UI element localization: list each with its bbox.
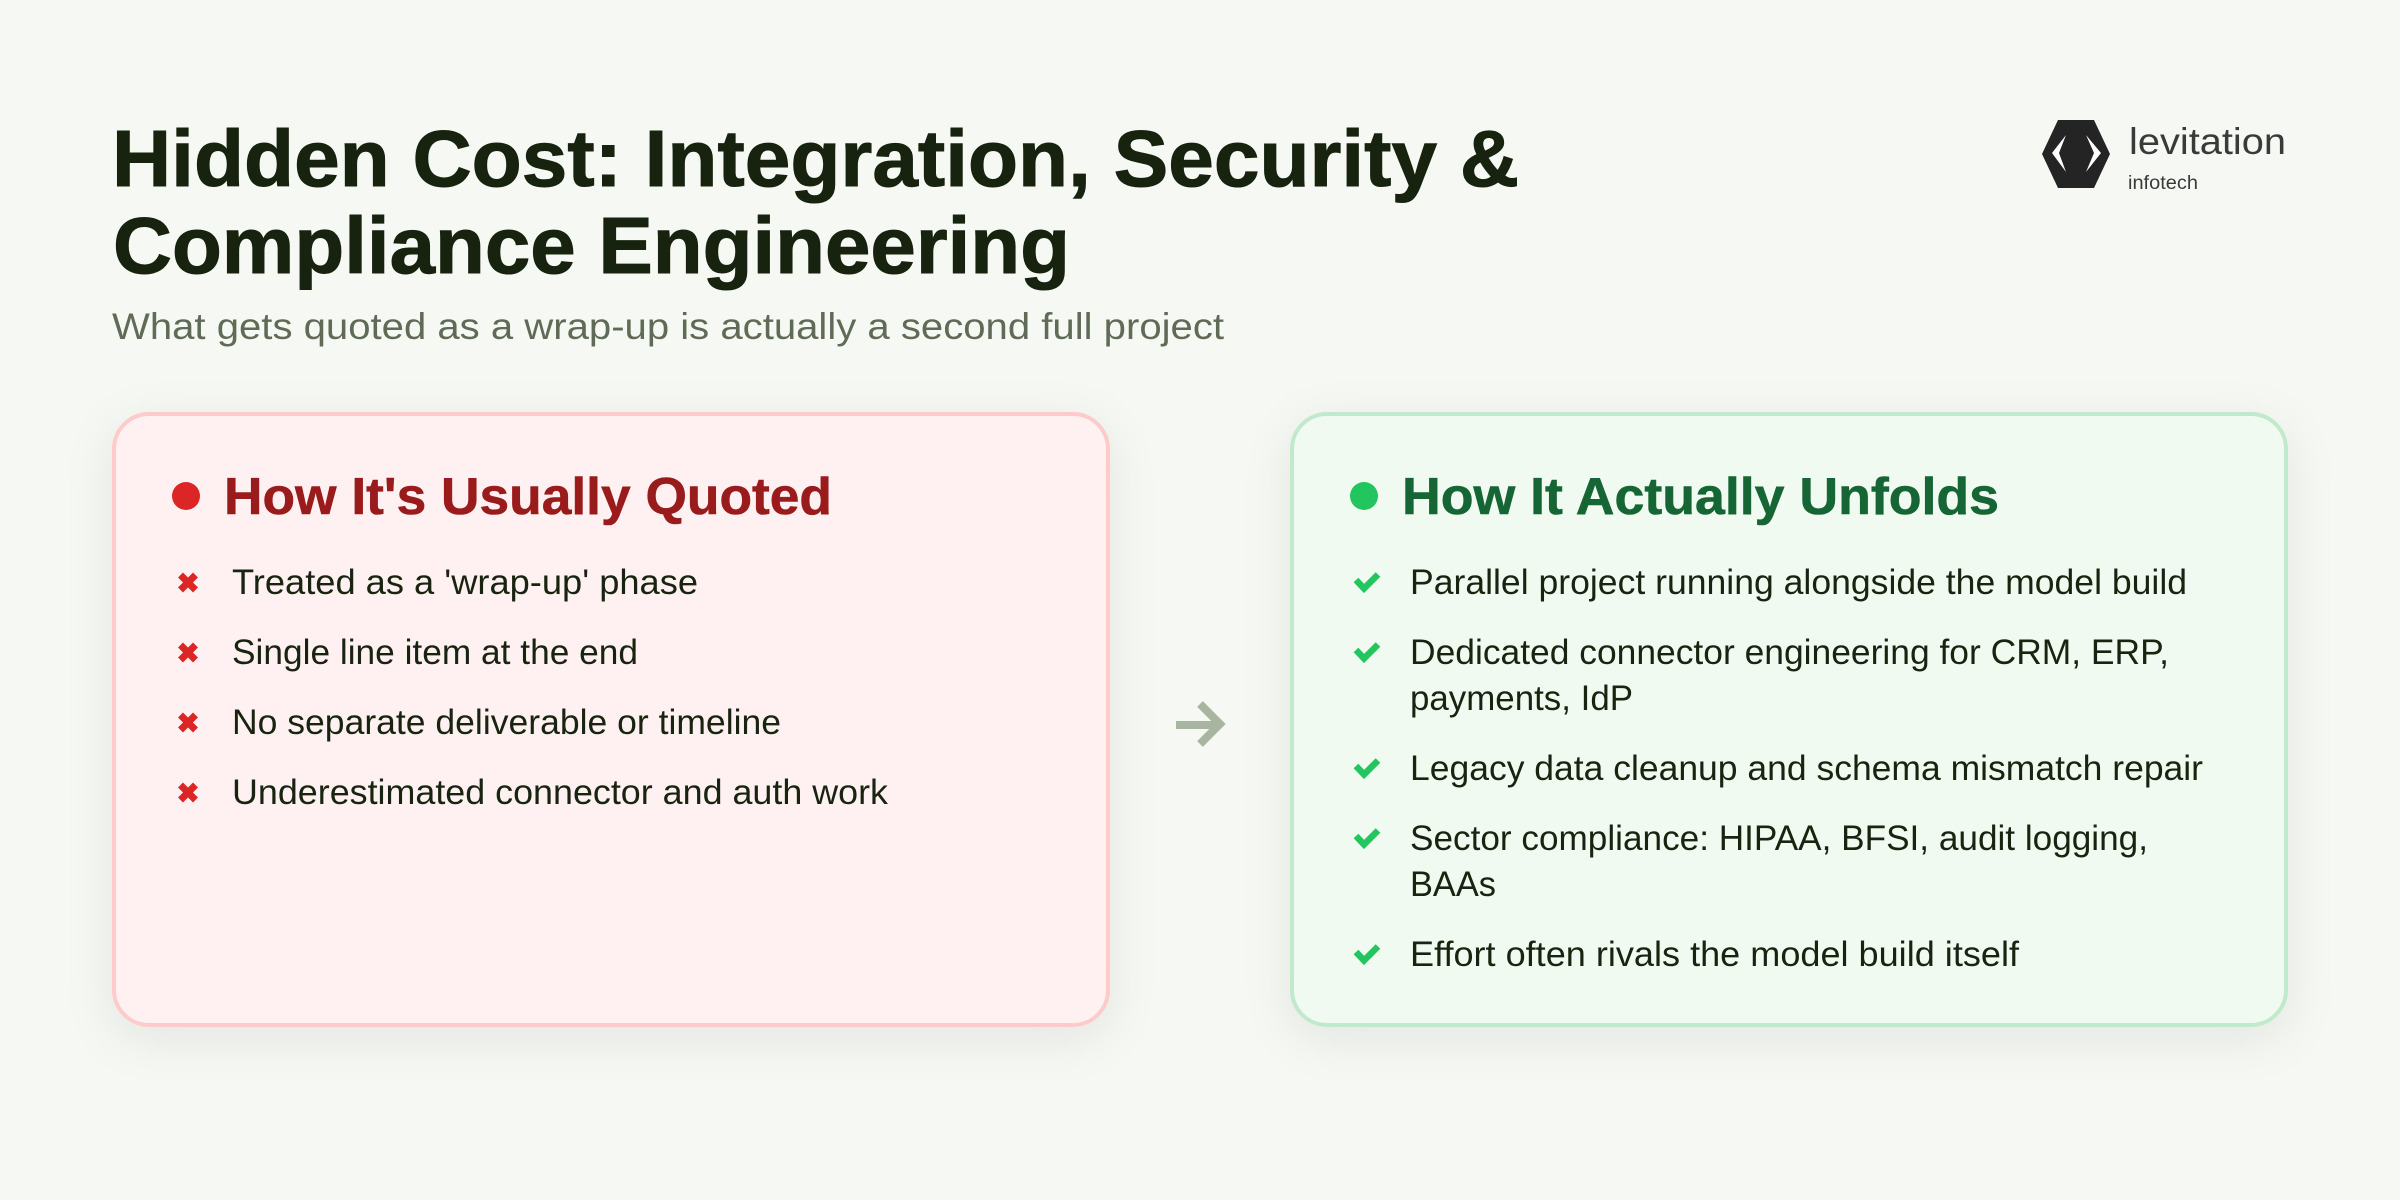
item 2: payments, IdP: [1410, 679, 1633, 718]
logo: levitation infotech: [2042, 120, 2286, 194]
item 4: Underestimated connector and auth work: [232, 773, 889, 812]
panel: how it actually unfolds: [1292, 414, 2286, 1025]
panel heading: How It Actually Unfolds: [1402, 468, 1999, 526]
quoted list: [180, 563, 889, 812]
logo wordmark: infotech: [2128, 173, 2198, 194]
item 4: Sector compliance: HIPAA, BFSI, audit logging,: [1410, 819, 2148, 858]
panel heading: How It's Usually Quoted: [224, 468, 832, 526]
item 3: No separate deliverable or timeline: [232, 703, 781, 742]
icon: hexagon logo mark: [2042, 120, 2110, 188]
arrow: [1176, 704, 1220, 744]
logo wordmark: [2128, 121, 2286, 194]
item 1: Treated as a 'wrap-up' phase: [232, 563, 698, 602]
logo wordmark: levitation: [2129, 121, 2286, 162]
item 4: BAAs: [1410, 865, 1496, 904]
item 4: [1356, 819, 2148, 904]
item 5: Effort often rivals the model build itself: [1410, 935, 2019, 974]
panel: how it's usually quoted: [114, 414, 1108, 1025]
status dot: red: [172, 482, 200, 510]
item 3: Legacy data cleanup and schema mismatch repair: [1410, 749, 2203, 788]
unfolds list: [1356, 563, 2203, 974]
title: Compliance Engineering: [113, 201, 1070, 290]
item 2: Single line item at the end: [232, 633, 638, 672]
status dot: green: [1350, 482, 1378, 510]
subtitle: What gets quoted as a wrap-up is actually a second full project: [112, 306, 1225, 347]
item 1: Parallel project running alongside the model build: [1410, 563, 2187, 602]
item 2: Dedicated connector engineering for CRM, ERP,: [1410, 633, 2169, 672]
item 2: [1356, 633, 2169, 718]
title: Hidden Cost: Integration, Security &: [112, 114, 1519, 203]
title: [112, 114, 1519, 290]
